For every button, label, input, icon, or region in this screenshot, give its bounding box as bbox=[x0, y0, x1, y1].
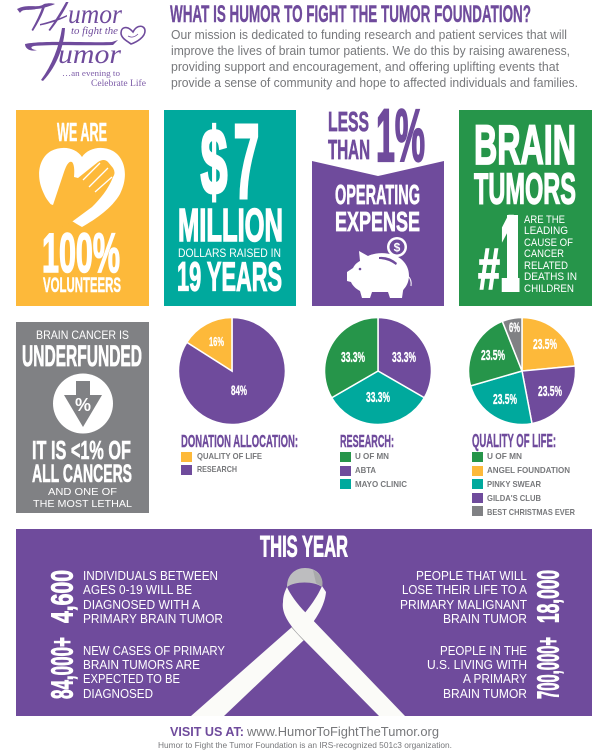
legend: donation allocation: DONATION ALLOCATION: bbox=[181, 431, 298, 451]
stat: 84,000+: DIAGNOSED bbox=[83, 687, 153, 701]
panel: brain tumors: DEATHS IN bbox=[524, 271, 577, 283]
panel: volunteers: VOLUNTEERS bbox=[43, 273, 121, 297]
chart: quality of life pie: 23.5% bbox=[533, 336, 557, 353]
chart: quality of life pie: 23.5% bbox=[538, 383, 562, 400]
mission text: Our mission is dedicated to funding research and patient services that will bbox=[171, 28, 567, 42]
stat: 18,000: PEOPLE THAT WILL bbox=[416, 569, 527, 583]
stat: 18,000 bbox=[400, 569, 566, 626]
chart: research pie: 33.3% bbox=[341, 349, 365, 366]
logo: umor bbox=[58, 39, 122, 69]
panel: seven million dollars: DOLLARS RAISED IN bbox=[178, 248, 281, 260]
chart: donation allocation pie: 84% bbox=[231, 382, 247, 398]
legend: donation allocation: QUALITY OF LIFE bbox=[197, 451, 262, 461]
panel: seven million dollars: 7 bbox=[234, 103, 260, 221]
legend: quality of life: U OF MN bbox=[487, 451, 522, 461]
footer: VISIT US AT: bbox=[170, 724, 244, 739]
panel: brain tumors: LEADING bbox=[524, 225, 568, 237]
panel: this year: THIS YEAR bbox=[260, 530, 348, 564]
footer: www.HumorToFightTheTumor.org bbox=[246, 724, 439, 739]
mission text: providing support and encouragement, and offering uplifting events that bbox=[171, 60, 560, 74]
panel: underfunded bbox=[16, 322, 149, 513]
panel: brain tumors: ARE THE bbox=[524, 214, 565, 226]
panel: underfunded: UNDERFUNDED bbox=[22, 340, 142, 373]
stat: 4,600: 4,600 bbox=[44, 570, 80, 623]
panel: seven million dollars: MILLION bbox=[178, 199, 283, 251]
stat: 18,000: 18,000 bbox=[530, 570, 566, 623]
chart: donation allocation pie bbox=[178, 317, 285, 424]
logo: Celebrate Life bbox=[91, 78, 146, 88]
panel: operating expense: OPERATING bbox=[335, 179, 420, 210]
panel: volunteers: WE ARE bbox=[57, 117, 107, 147]
icon: piggy bank bbox=[347, 237, 411, 298]
icon: piggy bank: $ bbox=[394, 240, 401, 254]
legend: donation allocation: RESEARCH bbox=[197, 464, 237, 474]
chart: donation allocation pie: 16% bbox=[209, 334, 224, 349]
icon: down arrow percent bbox=[53, 374, 113, 434]
stat: 84,000+ bbox=[44, 637, 226, 701]
stat: 4,600: PRIMARY BRAIN TUMOR bbox=[83, 612, 223, 626]
stat: 700,000+: U.S. LIVING WITH bbox=[427, 658, 527, 672]
panel: underfunded: AND ONE OF bbox=[48, 486, 117, 498]
panel: operating expense: THAN bbox=[328, 134, 370, 165]
stat: 4,600: DIAGNOSED WITH A bbox=[83, 598, 201, 612]
legend: research: MAYO CLINIC bbox=[355, 479, 407, 489]
stat: 700,000+: A PRIMARY bbox=[463, 672, 528, 686]
stat: 700,000+ bbox=[427, 637, 566, 701]
legend: quality of life: ANGEL FOUNDATION bbox=[487, 465, 570, 475]
panel: operating expense: 1% bbox=[376, 94, 425, 177]
chart: research pie bbox=[325, 318, 431, 424]
panel: brain tumors bbox=[459, 110, 592, 314]
legend: research: ABTA bbox=[355, 465, 376, 475]
panel: brain tumors: # bbox=[478, 237, 500, 302]
stat: 84,000+: BRAIN TUMORS ARE bbox=[83, 658, 200, 672]
chart: quality of life pie: 23.5% bbox=[481, 347, 505, 364]
legend: quality of life: BEST CHRISTMAS EVER bbox=[487, 507, 575, 517]
stat: 84,000+: EXPECTED TO BE bbox=[83, 672, 180, 686]
panel: underfunded: ALL CANCERS bbox=[32, 460, 132, 488]
logo: …an evening to bbox=[62, 68, 120, 78]
logo: to fight the bbox=[71, 26, 118, 37]
panel: seven million dollars: 19 YEARS bbox=[177, 254, 282, 300]
panel: brain tumors: 1 bbox=[500, 192, 520, 314]
stat: 700,000+: BRAIN TUMOR bbox=[443, 687, 527, 701]
legend: quality of life: PINKY SWEAR bbox=[487, 479, 541, 489]
mission text bbox=[171, 28, 578, 90]
stat: 700,000+: PEOPLE IN THE bbox=[440, 644, 527, 658]
panel: underfunded: IT IS <1% OF bbox=[32, 435, 131, 465]
chart: research pie: 33.3% bbox=[392, 349, 416, 366]
stat: 4,600 bbox=[44, 569, 223, 626]
panel: underfunded: THE MOST LETHAL bbox=[33, 498, 132, 510]
panel: seven million dollars bbox=[164, 103, 296, 306]
chart: research pie: 33.3% bbox=[366, 389, 390, 406]
panel: operating expense: EXPENSE bbox=[335, 206, 420, 237]
stat: 4,600: INDIVIDUALS BETWEEN bbox=[83, 569, 218, 583]
stat: 18,000: LOSE THEIR LIFE TO A bbox=[402, 583, 528, 597]
icon: down arrow percent: % bbox=[75, 395, 91, 415]
mission text: improve the lives of brain tumor patients. We do this by raising awareness, bbox=[171, 44, 570, 58]
stat: 84,000+: NEW CASES OF PRIMARY bbox=[83, 644, 226, 658]
stat: 84,000+: 84,000+ bbox=[44, 637, 80, 699]
panel: operating expense: LESS bbox=[328, 106, 369, 137]
icon: awareness ribbon bbox=[191, 568, 405, 716]
legend: quality of life: GILDA'S CLUB bbox=[487, 493, 541, 503]
mission text: provide a sense of community and hope to affected individuals and families. bbox=[171, 76, 578, 90]
stat: 4,600: AGES 0-19 WILL BE bbox=[83, 583, 192, 597]
icon: heart with hand bbox=[38, 148, 125, 228]
panel: brain tumors: CHILDREN bbox=[524, 283, 574, 295]
logo bbox=[17, 0, 146, 88]
stat: 18,000: PRIMARY MALIGNANT bbox=[400, 598, 527, 612]
panel: seven million dollars: $ bbox=[200, 109, 228, 214]
chart: quality of life pie bbox=[468, 318, 576, 425]
panel: this year: 700,000+ bbox=[530, 637, 566, 699]
footer: Humor to Fight the Tumor Foundation is an IRS-recognized 501c3 organization. bbox=[158, 740, 452, 750]
panel: brain tumors: RELATED bbox=[524, 260, 568, 272]
panel: volunteers: 100% bbox=[42, 221, 120, 284]
chart: quality of life pie: 23.5% bbox=[493, 391, 517, 408]
legend: donation allocation bbox=[181, 431, 298, 475]
stat: 18,000: BRAIN TUMOR bbox=[443, 612, 527, 626]
footer bbox=[158, 724, 452, 750]
legend: research: RESEARCH: bbox=[340, 431, 394, 451]
panel: this year bbox=[16, 529, 592, 716]
panel: underfunded: BRAIN CANCER IS bbox=[36, 330, 129, 342]
legend: research: U OF MN bbox=[355, 451, 389, 461]
panel: operating expense bbox=[312, 94, 444, 306]
panel: brain tumors: CAUSE OF bbox=[524, 237, 573, 249]
chart: quality of life pie: 6% bbox=[509, 319, 520, 335]
legend: research bbox=[340, 431, 407, 489]
panel: volunteers bbox=[16, 110, 149, 306]
panel: brain tumors: CANCER bbox=[524, 248, 564, 260]
legend: quality of life bbox=[472, 431, 575, 517]
